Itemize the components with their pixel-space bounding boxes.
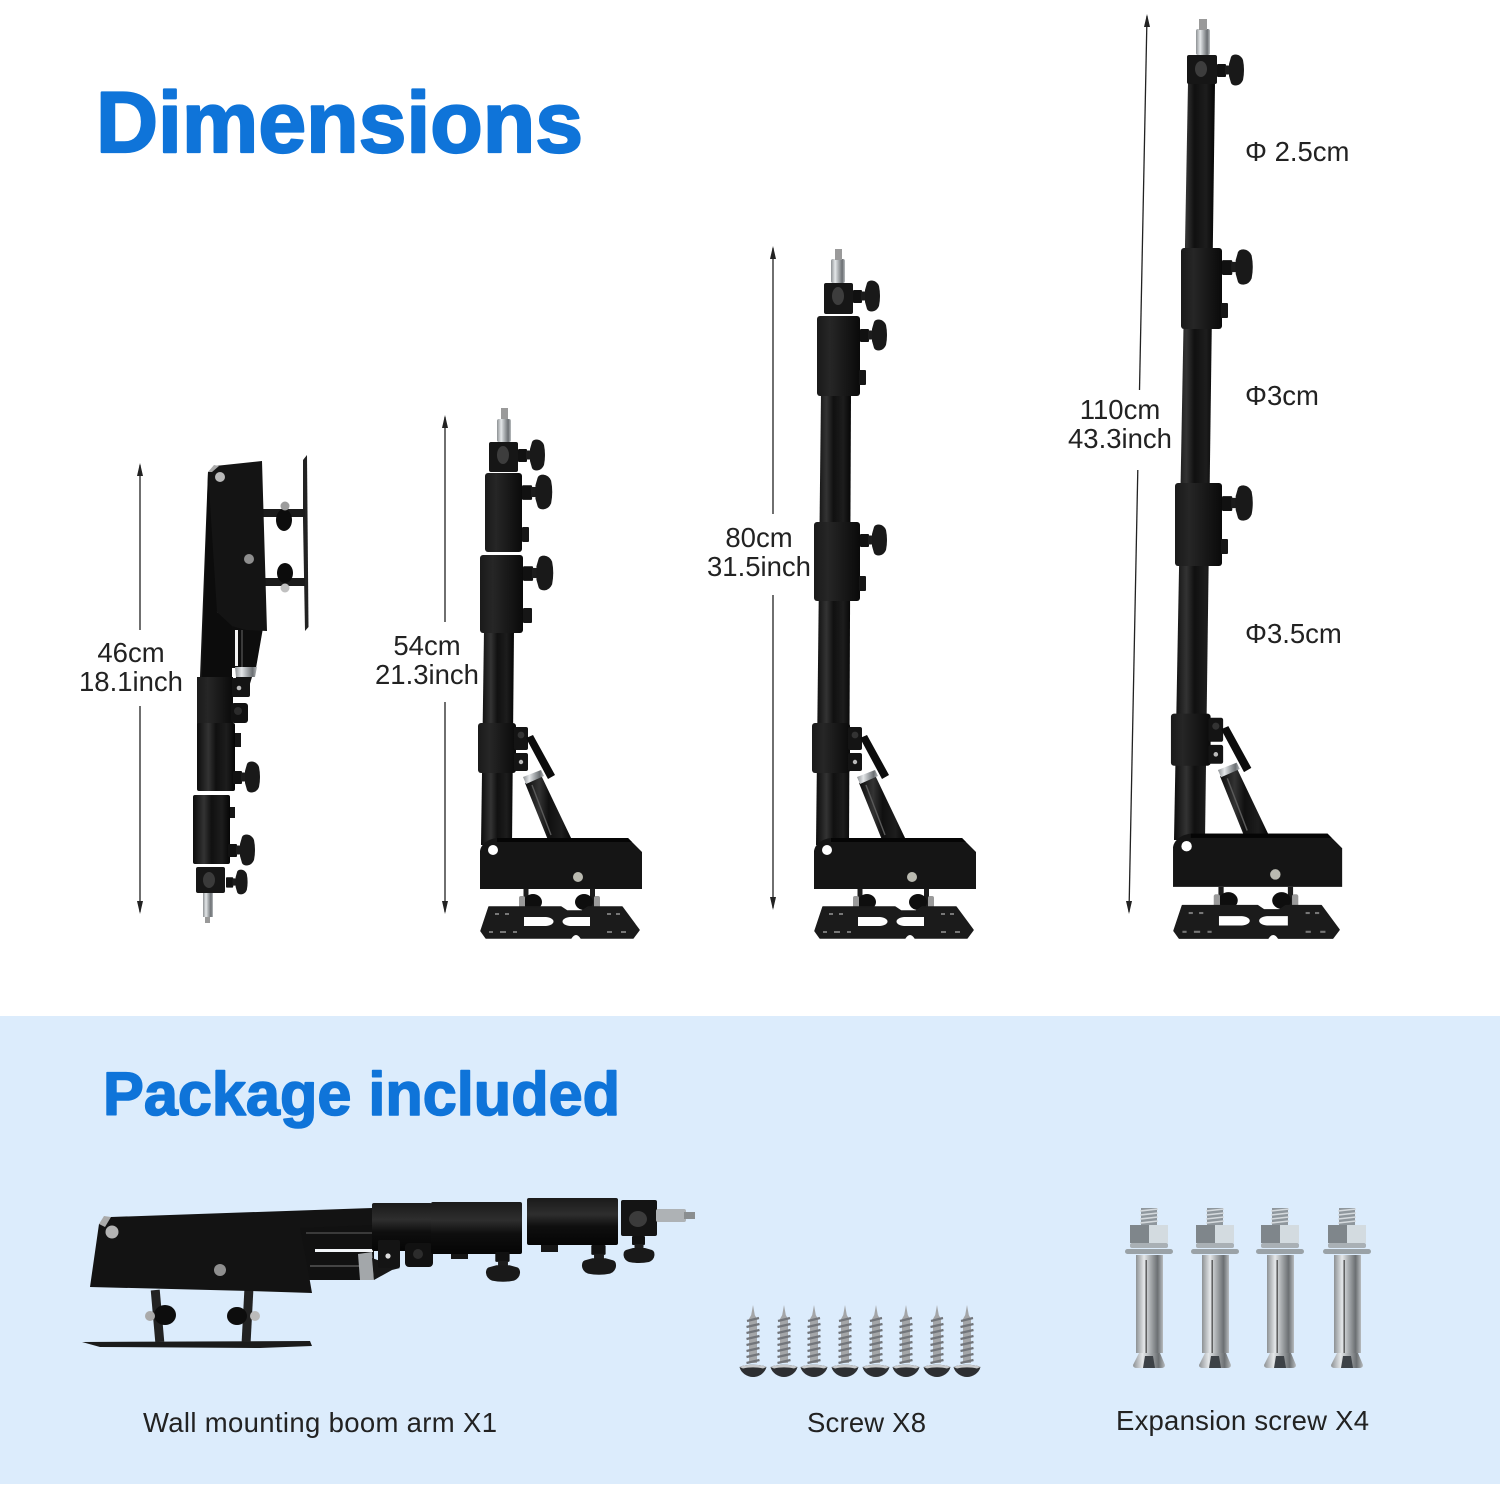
caption: expansion screws: Expansion screw X4 (1116, 1405, 1369, 1436)
knobs (1217, 54, 1253, 521)
heading: Package included: Package included (103, 1060, 620, 1129)
pole (481, 630, 514, 845)
height arrow: 46cm (137, 463, 143, 914)
height arrow: 110cm (1126, 14, 1150, 914)
caption: boom arm: Wall mounting boom arm X1 (143, 1407, 497, 1438)
wall plate and feet (82, 1290, 312, 1348)
label: 46cm 18.1inch: 18.1inch (79, 666, 183, 697)
tubes under housing (231, 622, 263, 697)
knobs (518, 440, 553, 590)
label: 110cm 43.3inch: 43.3inch (1068, 423, 1172, 454)
head with spigot (1187, 19, 1217, 84)
telescopic sections (480, 473, 532, 633)
stand 4: 110cm (1171, 19, 1342, 938)
label: 54cm 21.3inch: 54cm (393, 630, 461, 661)
expansion screws x4 (1125, 1208, 1371, 1368)
housing (90, 1208, 372, 1293)
label: 80cm 31.5inch: 31.5inch (707, 551, 811, 582)
base mount (1171, 714, 1342, 938)
stand 2: 54cm (478, 408, 642, 938)
brackets with lock knobs (263, 502, 305, 592)
head with spigot (824, 249, 853, 314)
height arrow: 80cm (770, 246, 776, 910)
label: 110cm 43.3inch: 110cm (1080, 394, 1160, 425)
knobs (853, 280, 887, 556)
stand 3: 80cm (812, 249, 976, 938)
wall plate (303, 455, 308, 631)
wood screws x8 (740, 1305, 980, 1377)
telescopic sections (814, 316, 866, 601)
diameter label: 2.5cm: Φ 2.5cm (1245, 136, 1349, 167)
caption: screws: Screw X8 (807, 1407, 926, 1438)
head with spigot (489, 408, 518, 472)
base mount (812, 723, 976, 938)
panel background (0, 1016, 1500, 1484)
label: 46cm 18.1inch: 46cm (97, 637, 165, 668)
head with spigot (621, 1200, 695, 1236)
title: Dimensions: Dimensions (96, 75, 583, 171)
knobs (486, 1236, 654, 1282)
height arrow: 54cm (442, 415, 448, 914)
base mount (478, 723, 642, 938)
label: 54cm 21.3inch: 21.3inch (375, 659, 479, 690)
boom arm, horizontal (82, 1198, 695, 1348)
bolts (99, 1216, 226, 1276)
telescopic sections (372, 1198, 618, 1268)
pole (816, 393, 851, 845)
telescopic sections (1175, 248, 1228, 566)
pole (1174, 83, 1215, 840)
diameter label: 3.5cm: Φ3.5cm (1245, 618, 1342, 649)
label: 80cm 31.5inch: 80cm (725, 522, 793, 553)
diameter label: 3cm: Φ3cm (1245, 380, 1319, 411)
telescopic sections (193, 677, 250, 923)
housing (200, 461, 267, 677)
adjustment knobs (226, 762, 260, 894)
panel: package included (0, 1016, 1500, 1484)
stand 1: folded arm, inverted (193, 455, 308, 923)
tubes (300, 1222, 400, 1280)
